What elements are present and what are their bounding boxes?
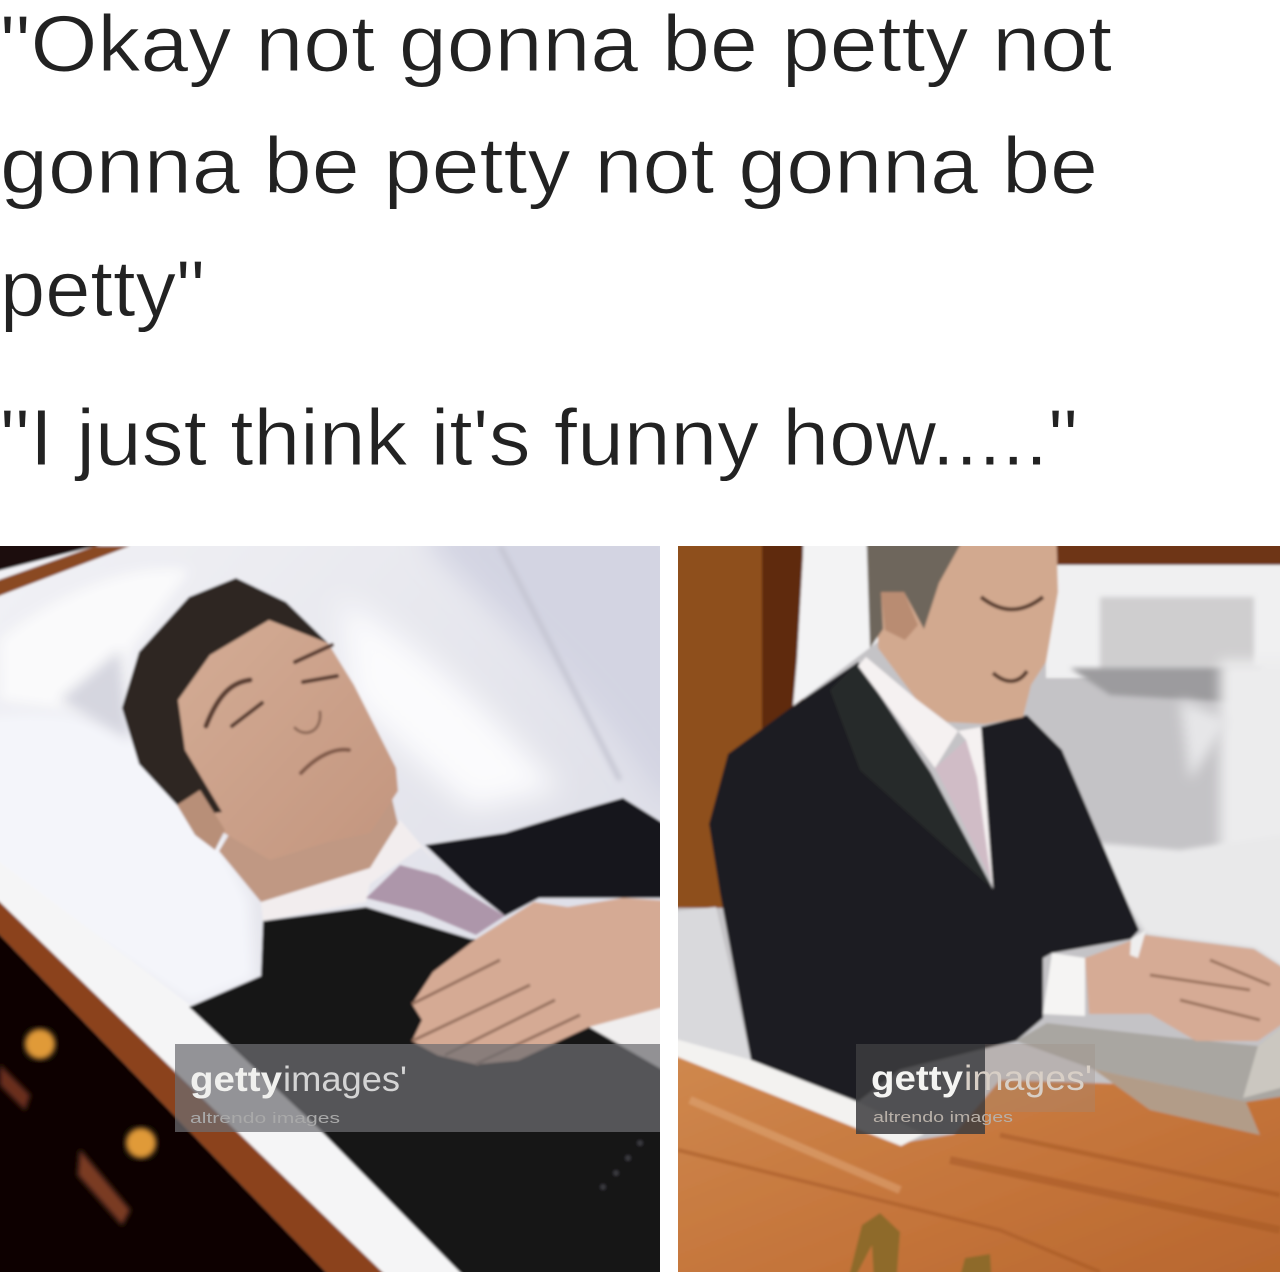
suit (709, 662, 1139, 1102)
shirt cuff (1043, 953, 1085, 1016)
panel: man typing in coffin (650, 520, 1280, 1280)
watermark: images' (283, 1060, 407, 1099)
small cuff (1130, 930, 1146, 958)
tie (935, 740, 991, 879)
shirt collar (858, 657, 958, 768)
panel: man lying in coffin (0, 520, 690, 1280)
watermark: getty (871, 1059, 964, 1098)
wood backdrop (760, 546, 804, 731)
ear (881, 592, 918, 640)
eyes and mouth (981, 597, 1043, 681)
laptop (1016, 1022, 1280, 1136)
caption: not gonna be petty: petty" (0, 244, 205, 333)
watermark: altrendo images (190, 1110, 340, 1127)
hair (865, 546, 961, 648)
eyes, nose and mouth (206, 645, 349, 773)
coffin lining (790, 546, 880, 708)
face (168, 615, 398, 860)
neck (219, 790, 400, 902)
caption: not gonna be petty: "Okay not gonna be petty not (0, 0, 1112, 88)
hair (122, 578, 328, 815)
caption: not gonna be petty (0, 0, 1112, 333)
watermark: getty (190, 1060, 283, 1099)
face (876, 546, 1060, 726)
watermark (175, 1044, 660, 1132)
tie (366, 865, 505, 935)
hand (412, 898, 690, 1064)
shirt collar (262, 822, 421, 922)
wood casket edge (0, 900, 384, 1272)
watermark: images' (964, 1059, 1092, 1098)
jacket buttons (600, 1140, 643, 1190)
watermark (856, 1044, 1095, 1134)
white sleeve cuff (588, 1006, 660, 1070)
ear (177, 790, 225, 850)
white frill edge (678, 1039, 924, 1148)
watermark: altrendo images (873, 1109, 1013, 1126)
suit (189, 907, 690, 1280)
wood casket (678, 1056, 1280, 1272)
latch handles (849, 1212, 901, 1272)
caption: I just think it's funny how: "I just think it's funny how....." (0, 393, 1078, 482)
hands (1085, 935, 1280, 1041)
caption: not gonna be petty: gonna be petty not gonna be (0, 121, 1098, 210)
